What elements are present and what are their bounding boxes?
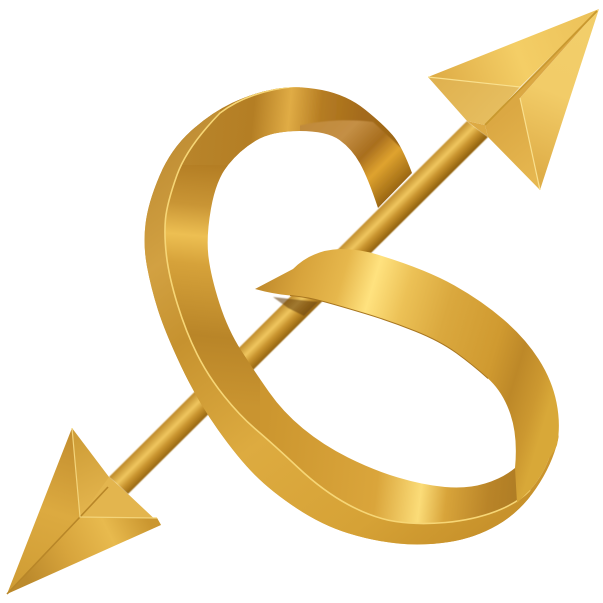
arrowhead: lower left bbox=[7, 428, 161, 594]
arrowhead: upper right bbox=[428, 9, 599, 190]
ribbon: left side and lower band in front of the shaft bbox=[144, 87, 559, 544]
arrow shaft bbox=[109, 121, 488, 494]
ribbon: back band behind the shaft bbox=[162, 87, 412, 208]
ribbon: right lobe with pointed fold bbox=[255, 249, 559, 503]
